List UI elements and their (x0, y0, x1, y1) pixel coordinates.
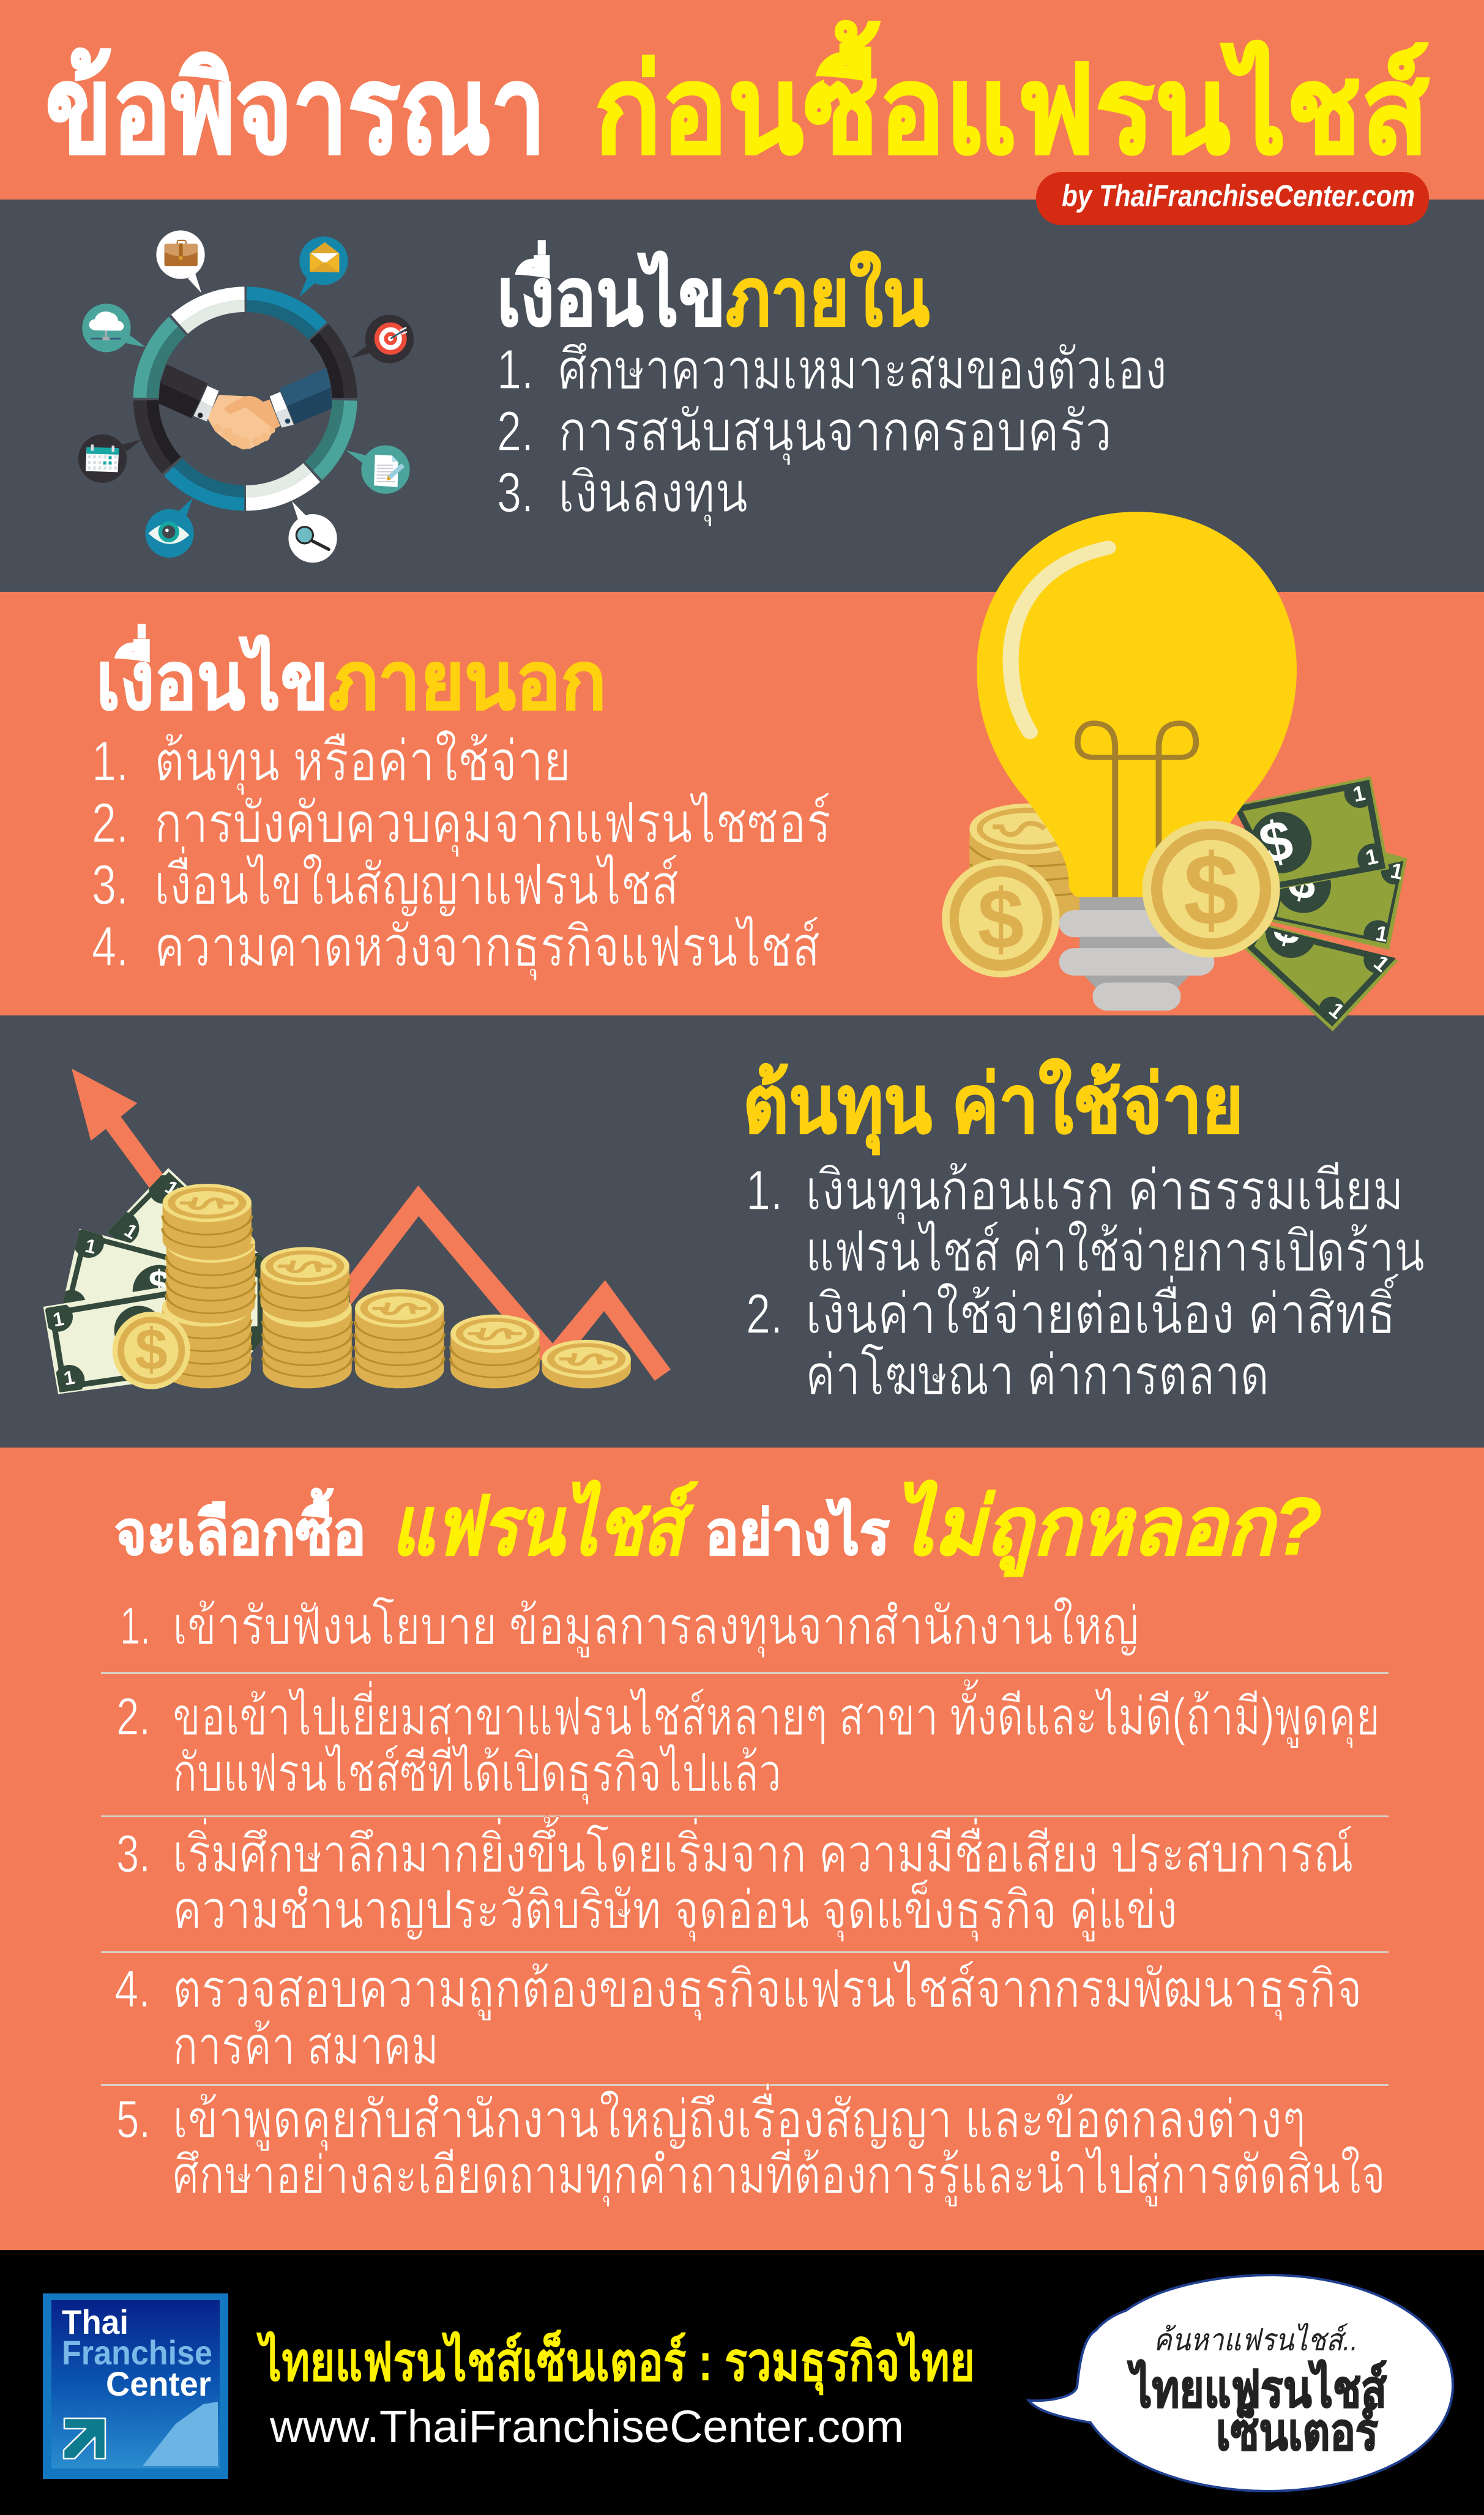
badge: by ThaiFranchiseCenter.com: by ThaiFranchiseCenter.com (1062, 179, 1415, 213)
coin stack 4 (450, 1315, 540, 1388)
panel: costs and expenses (43, 1058, 1423, 1394)
banknotes: 1 (121, 1219, 141, 1243)
left coin: $ (977, 872, 1024, 966)
list: costs: 2. (746, 1283, 783, 1345)
icon: handshake business ring (78, 230, 414, 562)
heading: external conditions: เงื่อนไข (96, 624, 329, 726)
callout: search franchise speech bubble (1029, 2275, 1453, 2491)
banknotes: 1 (1351, 781, 1368, 807)
list: internal conditions: เงินลงทุน (558, 462, 748, 527)
icon: handshake (158, 364, 332, 449)
zigzag chart line (349, 1186, 671, 1381)
banknotes: 1 (1369, 951, 1393, 977)
tip 4: การค้า สมาคม (173, 2017, 439, 2076)
bulb base (1059, 897, 1214, 1011)
banknotes: $ (1268, 897, 1308, 956)
text: site name: ไทยแฟรนไชส์เซ็นเตอร์ : รวมธุรกิจไทย (256, 2329, 975, 2396)
panel: external conditions (0, 592, 1484, 1015)
banknotes: $ (1284, 851, 1323, 911)
list: external conditions: 4. (92, 916, 129, 978)
callout: search franchise speech bubble: ค้นหาแฟรนไชส์.. (1154, 2323, 1358, 2357)
banknotes: 1 (83, 1234, 99, 1258)
heading: external conditions: ภายนอก (329, 636, 606, 726)
logo: Thai Franchise Center: Franchise (62, 2333, 212, 2372)
list: costs (746, 1159, 1425, 1407)
tip 5: เข้าพูดคุยกับสำนักงานใหญ่ถึงเรื่องสัญญา และข้อตกลงต่างๆ (173, 2083, 1306, 2151)
list: external conditions: ความคาดหวังจากธุรกิจแฟรนไชส์ (154, 916, 820, 981)
panel: title banner (0, 0, 1484, 225)
list: internal conditions: การสนับสนุนจากครอบครัว (558, 400, 1112, 466)
list: external conditions (92, 730, 831, 981)
icon bubble: briefcase (156, 230, 205, 293)
illustration: light bulb with coins and banknotes (942, 512, 1408, 1031)
banknotes: 1 (1324, 998, 1349, 1023)
heading: how to avoid being cheated: อย่างไร (705, 1498, 890, 1568)
tip 4 (114, 1960, 1362, 2076)
tip 2: กับแฟรนไชส์ซีที่ได้เปิดธุรกิจไปแล้ว (173, 1736, 781, 1805)
coin stack behind bulb (969, 804, 1088, 922)
banknotes: 1 (1389, 859, 1405, 884)
front coin: $ (1184, 833, 1239, 946)
coin stack 3 (355, 1289, 444, 1388)
heading: how to avoid being cheated: จะเลือกซื้อ (114, 1488, 366, 1568)
coin stack 5 (542, 1340, 631, 1388)
list: internal conditions: 1. (497, 338, 534, 401)
ring segments (140, 293, 351, 504)
list: external conditions: 3. (92, 854, 129, 916)
banknotes: 1 (1363, 844, 1380, 870)
logo: Thai Franchise Center: Center (106, 2364, 211, 2403)
panel: how to choose a franchise (0, 1448, 1484, 2250)
illustration: coin stacks, money and chart arrow (43, 1069, 671, 1396)
heading: how to avoid being cheated: ไม่ถูกหลอก? (894, 1480, 1322, 1577)
bulb filament (1078, 723, 1196, 897)
bulb and coins (942, 512, 1297, 1011)
list: internal conditions: 3. (497, 462, 534, 524)
banknotes: $ (148, 1263, 170, 1306)
list: internal conditions: 2. (497, 400, 534, 463)
heading: costs: ต้นทุน ค่าใช้จ่าย (743, 1058, 1244, 1155)
bulb highlight (1011, 548, 1108, 732)
title (45, 20, 1429, 179)
tip 2: 2. (116, 1687, 151, 1746)
list: external conditions: การบังคับควบคุมจากแฟรนไชซอร์ (154, 792, 831, 858)
tip 5: 5. (116, 2090, 151, 2149)
coin stack 2 (261, 1247, 352, 1388)
banknotes: 1 (162, 1176, 182, 1200)
arrow up (72, 1069, 169, 1192)
heading: how to avoid being cheated (114, 1480, 1322, 1577)
icon bubble: envelope (299, 236, 348, 297)
tip 3: ความชำนาญประวัติบริษัท จุดอ่อน จุดแข็งธุรกิจ คู่แข่ง (173, 1879, 1177, 1942)
list: external conditions: 2. (92, 792, 129, 854)
front coin: $ (135, 1318, 168, 1383)
icon bubble: target (350, 315, 414, 364)
list: external conditions: เงื่อนไขในสัญญาแฟรนไชส์ (154, 846, 679, 917)
tip 1: 1. (120, 1597, 151, 1656)
heading: how to avoid being cheated: แฟรนไชส์ (392, 1480, 698, 1571)
banknotes: 1 (51, 1307, 65, 1331)
panel: footer (0, 2250, 1484, 2515)
list: costs: 1. (746, 1159, 783, 1222)
icon bubble: eye (145, 498, 194, 558)
heading: external conditions (96, 624, 606, 726)
logo: Thai Franchise Center: Thai (62, 2303, 129, 2341)
logo: Thai Franchise Center (43, 2293, 228, 2479)
bulb glass (977, 512, 1297, 897)
banknotes (1238, 776, 1408, 1031)
tip 3 (116, 1816, 1354, 1942)
coin stack 1 (162, 1184, 255, 1388)
callout: search franchise speech bubble: ไทยแฟรนไชส์ (1127, 2360, 1387, 2418)
banknotes (43, 1168, 271, 1396)
list: internal conditions: ศึกษาความเหมาะสมของตัวเอง (558, 338, 1167, 401)
banknotes: 1 (62, 1366, 76, 1389)
banknotes: $ (1254, 807, 1298, 876)
banknotes: 1 (1374, 921, 1390, 947)
list: costs: ค่าโฆษณา ค่าการตลาด (805, 1343, 1269, 1407)
icon bubble: magnifier (288, 501, 337, 562)
icon bubble: calendar (78, 435, 141, 483)
list: costs: เงินค่าใช้จ่ายต่อเนื่อง ค่าสิทธิ์ (805, 1273, 1400, 1345)
list: external conditions: ต้นทุน หรือค่าใช้จ่าย (154, 730, 571, 796)
tip 1: เข้ารับฟังนโยบาย ข้อมูลการลงทุนจากสำนักงานใหญ่ (173, 1597, 1139, 1658)
heading: internal conditions: เงื่อนไข (497, 240, 726, 342)
heading: internal conditions (497, 240, 930, 342)
coin stacks (113, 1184, 631, 1389)
text: website: www.ThaiFranchiseCenter.com (269, 2401, 904, 2452)
badge: by ThaiFranchiseCenter.com (1036, 172, 1429, 225)
title: ข้อพิจารณา (45, 42, 546, 179)
tip 2 (116, 1679, 1380, 1805)
left coin (942, 859, 1059, 977)
heading: internal conditions: ภายใน (726, 251, 930, 342)
list: internal conditions (497, 338, 1167, 527)
tip 4: 4. (114, 1960, 151, 2019)
tip 3: 3. (116, 1825, 151, 1883)
tip 5 (116, 2083, 1385, 2207)
list: external conditions: 1. (92, 730, 129, 793)
front coin (1143, 821, 1280, 958)
front coin (113, 1312, 190, 1389)
panel: internal conditions (0, 200, 1484, 592)
callout: search franchise speech bubble: เซ็นเตอร์ (1216, 2401, 1378, 2461)
icon bubble: cloud (82, 304, 146, 352)
icon bubble: document (346, 445, 410, 494)
